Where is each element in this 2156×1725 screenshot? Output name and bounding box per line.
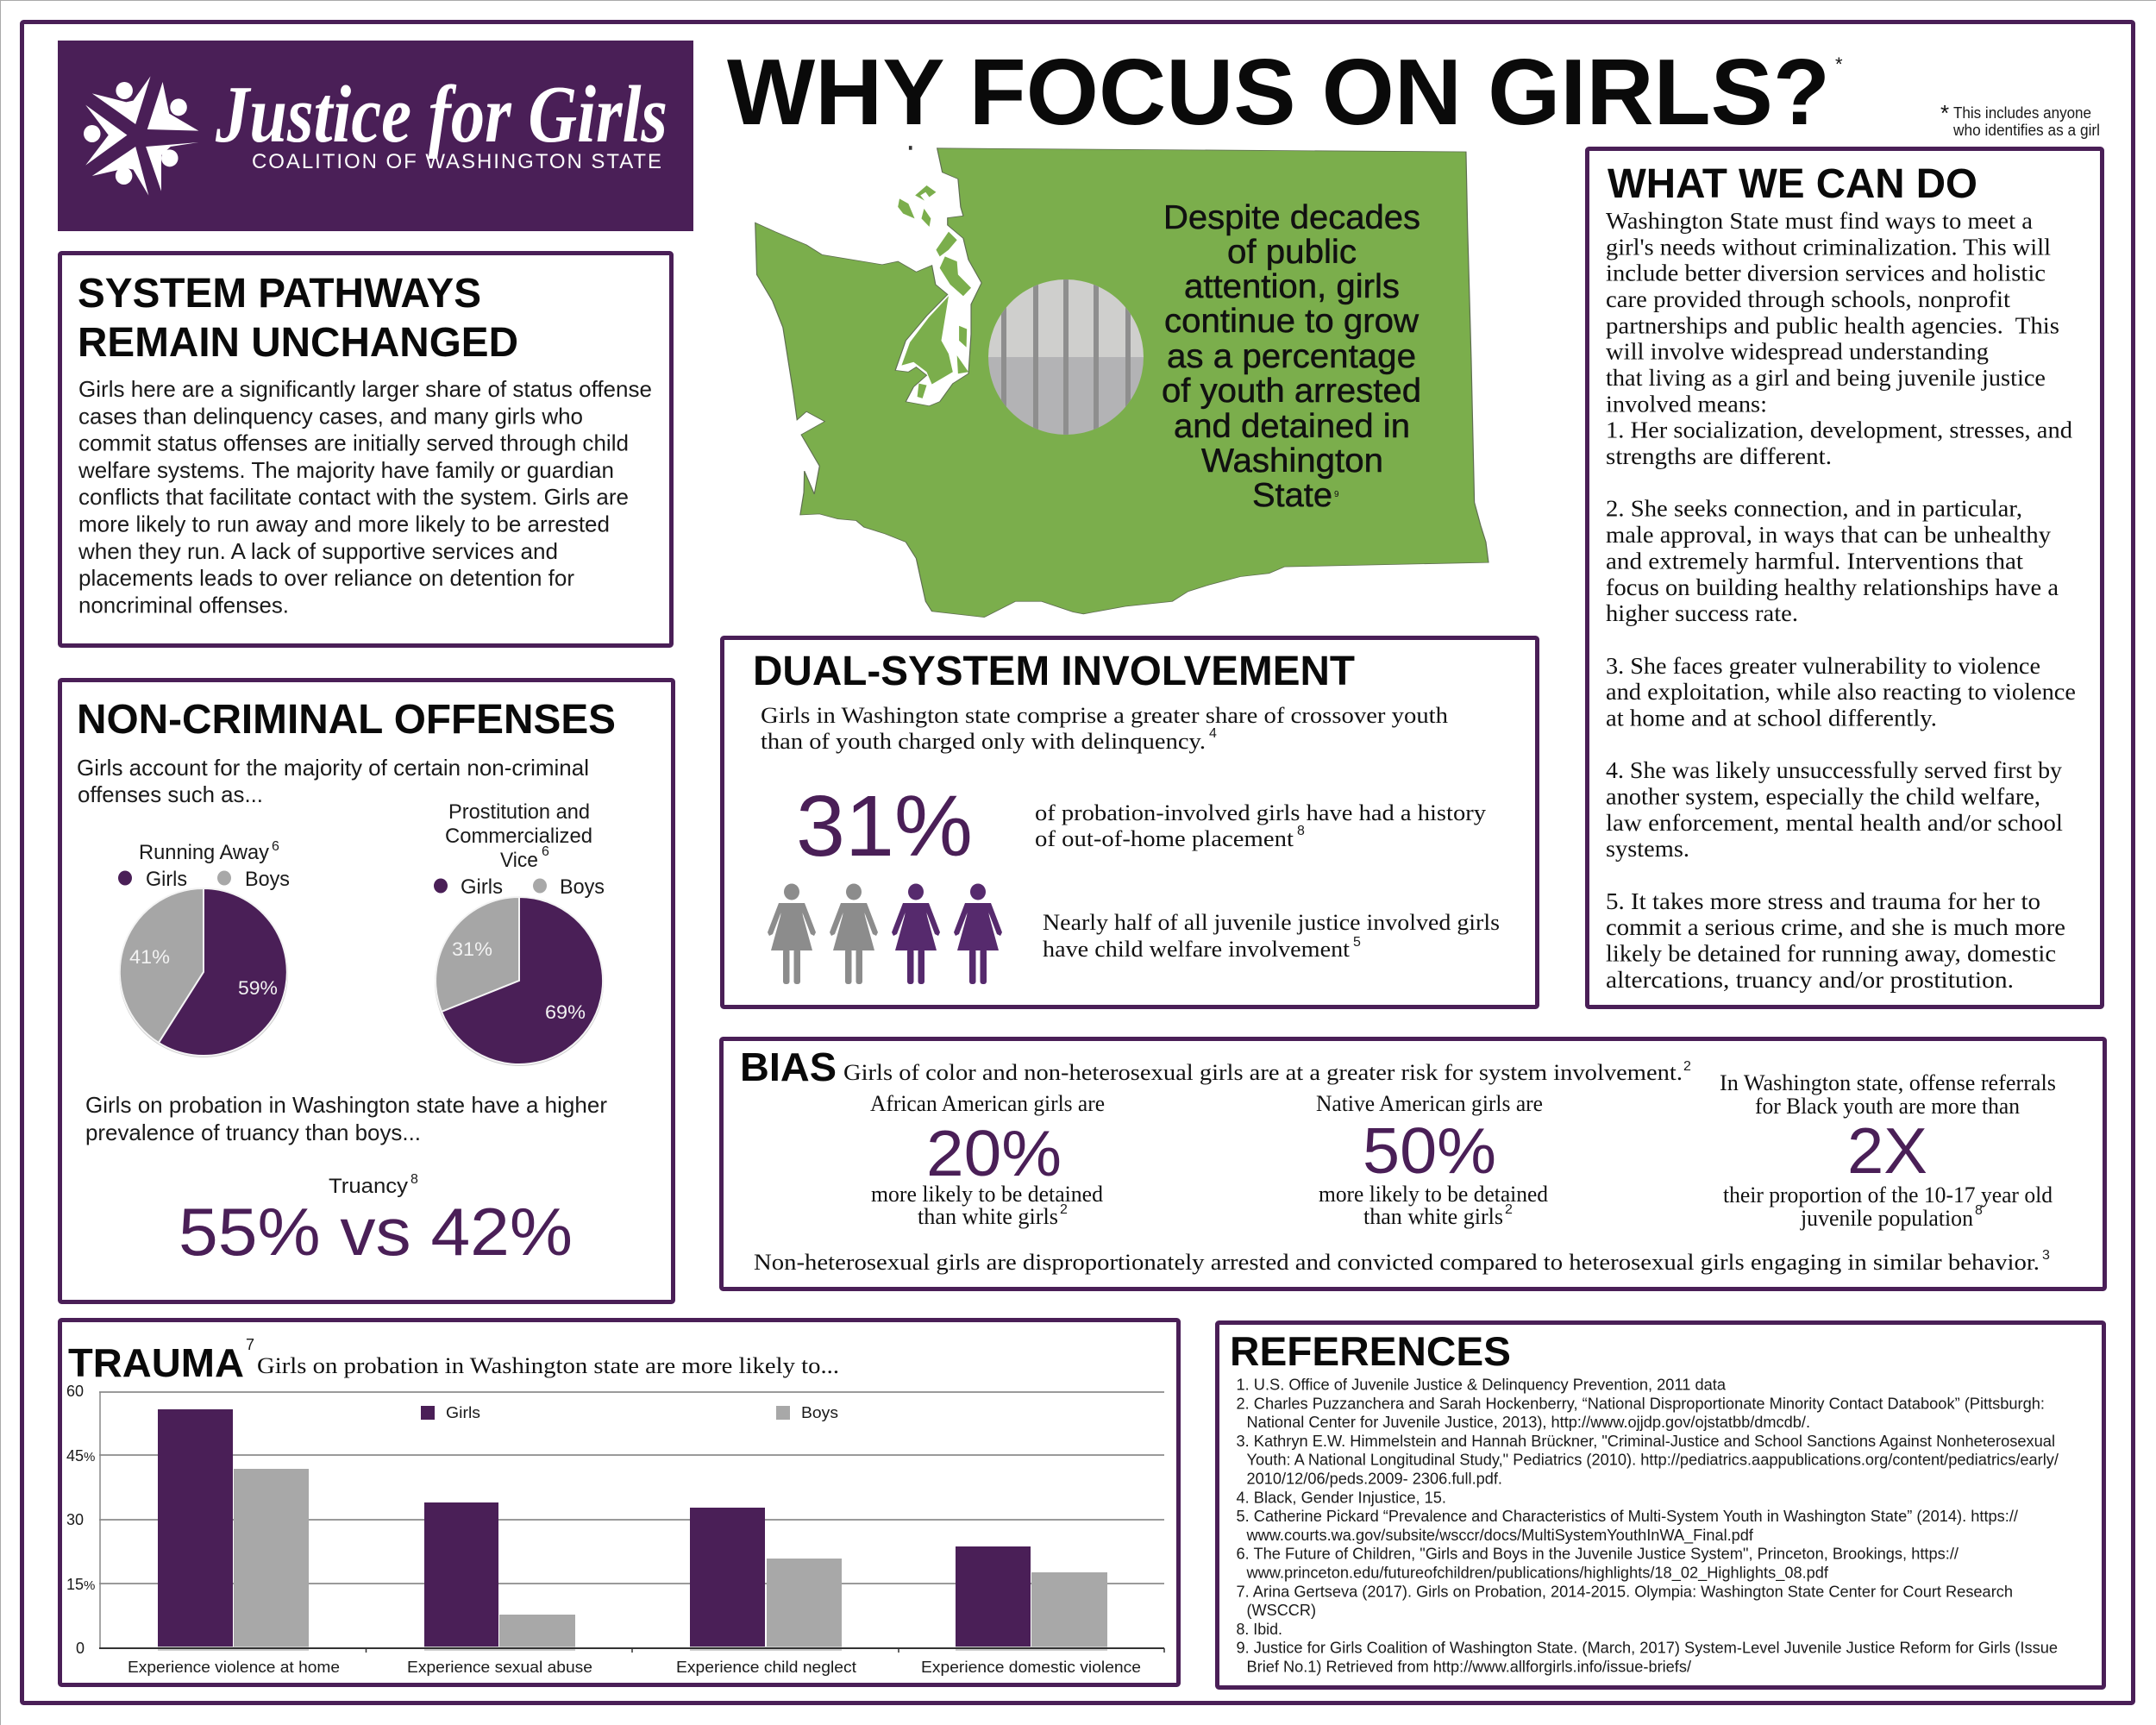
title: WHY FOCUS ON GIRLS? bbox=[727, 40, 1830, 145]
bars: domestic violence bbox=[956, 1546, 1107, 1647]
stat: Native American girls 50%: more likely to be detained bbox=[1319, 1182, 1548, 1207]
text block: what we can do body: 2. She seeks connection, and in particular, bbox=[1606, 496, 2022, 522]
text block: bias intro: Girls of color and non-heterosexual girls are at a greater risk for system involvement. bbox=[843, 1060, 1683, 1085]
stat: 31%: 31% bbox=[796, 778, 973, 875]
text block: truancy intro bbox=[85, 1092, 607, 1145]
legend: girls and boys bbox=[421, 1404, 838, 1421]
pie chart: running away: 59% bbox=[238, 977, 278, 999]
callout: despite decades: continue to grow bbox=[1164, 303, 1420, 340]
logo subtitle: COALITION OF WASHINGTON STATE bbox=[252, 150, 661, 173]
category labels bbox=[128, 1659, 1141, 1676]
icon: four girl figures bbox=[768, 883, 1002, 984]
heading: references: REFERENCES bbox=[1230, 1328, 1511, 1374]
stat: African American girls 20%: 2 bbox=[1060, 1202, 1068, 1217]
text block: what we can do body: another system, especially the child welfare, bbox=[1606, 783, 2040, 809]
text block: system pathways body: placements leads to over reliance on detention for bbox=[78, 565, 574, 591]
stat: Black youth 2X: for Black youth are more than bbox=[1755, 1094, 2020, 1119]
axis labels: 30 bbox=[66, 1511, 84, 1528]
panel: system pathways bbox=[60, 254, 671, 645]
chart title: prostitution and commercialized vice: Commercialized bbox=[445, 825, 592, 848]
text block: reference list: 2. Charles Puzzanchera and Sarah Hockenberry, “National Disproportionate Minority Contact Databook” (Pittsburgh: bbox=[1237, 1394, 2045, 1412]
pie chart: running away: 41% bbox=[129, 946, 170, 968]
label: truancy: 8 bbox=[411, 1172, 418, 1187]
stat: African American girls 20%: more likely to be detained bbox=[871, 1182, 1103, 1207]
text block: bias intro: 2 bbox=[1683, 1059, 1691, 1074]
category labels: Experience sexual abuse bbox=[407, 1659, 592, 1676]
text block: reference list: 6. The Future of Children, "Girls and Boys in the Juvenile Justice System", Princeton, Brookings, https:// bbox=[1237, 1545, 1959, 1563]
text block: what we can do body: 3. She faces greater vulnerability to violence bbox=[1606, 653, 2040, 679]
text block: dual-system intro: 4 bbox=[1209, 726, 1217, 741]
heading: trauma: 7 bbox=[246, 1336, 254, 1353]
text block: what we can do body: altercations, truancy and/or prostitution. bbox=[1606, 967, 2014, 993]
text block: what we can do body: focus on building healthy relationships have a bbox=[1606, 574, 2059, 600]
text block: intro bbox=[77, 755, 589, 807]
stat: Black youth 2X: In Washington state, offense referrals bbox=[1720, 1070, 2056, 1095]
callout: despite decades: of public bbox=[1227, 234, 1357, 271]
stat: African American girls 20% bbox=[870, 1091, 1105, 1229]
text block: what we can do body: partnerships and public health agencies. This bbox=[1606, 312, 2059, 338]
text block: what we can do body: 5. It takes more stress and trauma for her to bbox=[1606, 888, 2040, 914]
stat: Native American girls 50% bbox=[1316, 1091, 1548, 1229]
icon: jail bars bbox=[988, 279, 1144, 435]
label: truancy: Truancy bbox=[329, 1175, 408, 1198]
text block: system pathways body: Girls here are a significantly larger share of status offense bbox=[78, 376, 652, 402]
text block: child welfare involvement: Nearly half of all juvenile justice involved girls bbox=[1043, 910, 1500, 935]
callout: despite decades: attention, girls bbox=[1184, 268, 1400, 305]
text block: out-of-home placement: of out-of-home placement bbox=[1035, 826, 1294, 851]
text block: what we can do body: male approval, in ways that can be unhealthy bbox=[1606, 522, 2052, 548]
chart title: prostitution and commercialized vice: Vice bbox=[500, 849, 538, 872]
callout: despite decades bbox=[1162, 199, 1421, 514]
text block: non-heterosexual girls: 3 bbox=[2042, 1248, 2050, 1263]
text block: what we can do body: will involve widespread understanding bbox=[1606, 339, 1989, 365]
icon: star of figures bbox=[84, 76, 198, 196]
legend: prostitution: Girls bbox=[461, 875, 503, 899]
pie chart: running away bbox=[119, 888, 288, 1057]
text block: reference list: 8. Ibid. bbox=[1237, 1620, 1282, 1638]
axis labels: 45% bbox=[66, 1447, 95, 1465]
text block: what we can do body: care provided through schools, nonprofit bbox=[1606, 286, 2011, 312]
heading: non-criminal offenses: NON-CRIMINAL OFFENSES bbox=[77, 697, 616, 743]
text block: what we can do body: 4. She was likely unsuccessfully served first by bbox=[1606, 757, 2063, 783]
text block: what we can do body: involved means: bbox=[1606, 391, 1767, 417]
text block: what we can do body: girl's needs without criminalization. This will bbox=[1606, 234, 2051, 260]
stat: Black youth 2X: 8 bbox=[1975, 1203, 1983, 1218]
text block: system pathways body: cases than delinquency cases, and many girls who bbox=[78, 403, 583, 429]
heading: dual-system involvement: DUAL-SYSTEM INVOLVEMENT bbox=[753, 649, 1355, 694]
bars: violence at home bbox=[158, 1409, 309, 1647]
heading: what we can do: WHAT WE CAN DO bbox=[1608, 161, 1977, 207]
text block: reference list: www.princeton.edu/futureofchildren/publications/highlights/18_02_Highlights_08.pdf bbox=[1246, 1563, 1829, 1582]
callout: despite decades: Despite decades bbox=[1163, 199, 1420, 236]
bar chart: trauma bbox=[66, 1383, 1164, 1676]
callout: despite decades: of youth arrested bbox=[1162, 373, 1421, 410]
text block: system pathways body bbox=[78, 376, 652, 618]
chart title: prostitution and commercialized vice: Prostitution and bbox=[448, 800, 590, 824]
axis labels: 60 bbox=[66, 1383, 84, 1400]
text block: what we can do body: higher success rate. bbox=[1606, 600, 1798, 626]
text block: what we can do body: and exploitation, while also reacting to violence bbox=[1606, 679, 2076, 705]
heading: system pathways bbox=[78, 271, 518, 366]
stat: Black youth 2X: 2X bbox=[1847, 1114, 1927, 1187]
stat: Native American girls 50%: 2 bbox=[1505, 1202, 1513, 1217]
stat: Native American girls 50%: 50% bbox=[1363, 1114, 1496, 1187]
text block: system pathways body: commit status offenses are initially served through child bbox=[78, 430, 629, 456]
text block: reference list bbox=[1237, 1375, 2059, 1675]
logo banner bbox=[58, 41, 693, 231]
callout: despite decades: State bbox=[1252, 477, 1332, 514]
callout: despite decades: as a percentage bbox=[1167, 338, 1416, 375]
text block: reference list: National Center for Juvenile Justice, 2013), http://www.ojjdp.gov/ojstatbb/dmcdb/. bbox=[1247, 1413, 1810, 1431]
axis labels: 0 bbox=[76, 1640, 85, 1657]
stat: Black youth 2X: their proportion of the 10-17 year old bbox=[1723, 1182, 2053, 1208]
pie chart: prostitution: 31% bbox=[452, 938, 492, 960]
text block: reference list: 3. Kathryn E.W. Himmelstein and Hannah Brückner, "Criminal-Justice and School Sanctions Against Nonheterosexual bbox=[1237, 1432, 2055, 1450]
text block: child welfare involvement bbox=[1043, 910, 1500, 962]
panel: bias bbox=[721, 1038, 2104, 1289]
callout: despite decades: Washington bbox=[1201, 442, 1383, 480]
text block: what we can do body: at home and at school differently. bbox=[1606, 706, 1937, 731]
text block: system pathways body: noncriminal offenses. bbox=[78, 592, 289, 618]
callout: despite decades: and detained in bbox=[1174, 408, 1410, 445]
text block: dual-system intro: than of youth charged only with delinquency. bbox=[761, 729, 1206, 754]
panel: non-criminal offenses bbox=[60, 680, 673, 1302]
text block: child welfare involvement: 5 bbox=[1353, 935, 1361, 950]
legend: prostitution: Boys bbox=[560, 875, 605, 899]
legend: running away: Girls bbox=[146, 868, 187, 891]
bars: sexual abuse bbox=[424, 1502, 575, 1647]
text block: trauma intro: Girls on probation in Washington state are more likely to... bbox=[257, 1353, 839, 1378]
panel: dual-system involvement bbox=[723, 638, 1537, 1007]
text block: system pathways body: when they run. A lack of supportive services and bbox=[78, 538, 558, 564]
text block: dual-system intro bbox=[761, 703, 1448, 754]
text block: reference list: 2010/12/06/peds.2009- 2306.full.pdf. bbox=[1247, 1470, 1502, 1487]
legend: girls and boys: Boys bbox=[801, 1404, 838, 1421]
logo wordmark: Justice for Girls bbox=[215, 70, 667, 160]
stat: African American girls 20%: African American girls are bbox=[870, 1091, 1105, 1116]
text block: what we can do body: systems. bbox=[1606, 836, 1689, 862]
text block: reference list: Brief No.1) Retrieved from http://www.allforgirls.info/issue-briefs/ bbox=[1247, 1658, 1692, 1675]
text block: non-heterosexual girls: Non-heterosexual girls are disproportionately arrested and convicted compared to heterosexual girls engaging in similar behavior. bbox=[754, 1250, 2040, 1275]
stat: Black youth 2X bbox=[1720, 1070, 2056, 1231]
heading: system pathways: REMAIN UNCHANGED bbox=[78, 320, 518, 366]
pie chart: prostitution bbox=[435, 897, 604, 1066]
text block: out-of-home placement: 8 bbox=[1297, 824, 1305, 838]
stat: African American girls 20%: 20% bbox=[926, 1117, 1062, 1189]
chart title: running away: 6 bbox=[272, 839, 279, 854]
stat: Black youth 2X: juvenile population bbox=[1800, 1206, 1973, 1231]
text block: system pathways body: conflicts that facilitate contact with the system. Girls are bbox=[78, 484, 629, 510]
panel: what we can do bbox=[1587, 148, 2103, 1007]
text block: out-of-home placement bbox=[1035, 800, 1486, 851]
text block: what we can do body: commit a serious crime, and she is much more bbox=[1606, 914, 2065, 940]
axis labels: 15% bbox=[66, 1576, 95, 1593]
legend: running away: Boys bbox=[245, 868, 290, 891]
axis labels bbox=[66, 1383, 95, 1657]
stat: truancy 55% vs 42%: 55% vs 42% bbox=[179, 1194, 573, 1270]
text block: truancy intro: prevalence of truancy than boys... bbox=[85, 1120, 421, 1145]
text block: what we can do body: include better diversion services and holistic bbox=[1606, 260, 2046, 286]
text block: system pathways body: more likely to run away and more likely to be arrested bbox=[78, 511, 610, 536]
text block: what we can do body: likely be detained for running away, domestic bbox=[1606, 940, 2056, 966]
legend: running away bbox=[118, 868, 290, 891]
text block: what we can do body: that living as a girl and being juvenile justice bbox=[1606, 365, 2046, 391]
text block: reference list: Youth: A National Longitudinal Study," Pediatrics (2010). http://pediatrics.aappublications.org/content/pediatrics/early/ bbox=[1247, 1451, 2059, 1469]
footnote: anyone who identifies as a girl: who identifies as a girl bbox=[1952, 122, 2100, 139]
text block: system pathways body: welfare systems. The majority have family or guardian bbox=[78, 457, 614, 483]
heading: trauma: TRAUMA bbox=[68, 1340, 244, 1385]
legend: girls and boys: Girls bbox=[446, 1404, 480, 1421]
stat: African American girls 20%: than white girls bbox=[918, 1204, 1058, 1229]
chart title: prostitution and commercialized vice: 6 bbox=[542, 844, 549, 859]
text block: what we can do body bbox=[1606, 208, 2076, 993]
panel: references bbox=[1218, 1323, 2104, 1687]
text block: truancy intro: Girls on probation in Washington state have a higher bbox=[85, 1092, 607, 1118]
stat: Native American girls 50%: than white girls bbox=[1363, 1204, 1503, 1229]
footnote: anyone who identifies as a girl: This includes anyone bbox=[1953, 104, 2091, 122]
text block: intro: offenses such as... bbox=[78, 781, 263, 807]
pie chart: prostitution: 69% bbox=[545, 1001, 586, 1023]
category labels: Experience domestic violence bbox=[921, 1659, 1141, 1676]
legend: prostitution bbox=[434, 875, 605, 899]
category labels: Experience child neglect bbox=[676, 1659, 856, 1676]
text block: intro: Girls account for the majority of certain non-criminal bbox=[77, 755, 589, 781]
title: * bbox=[1835, 53, 1843, 75]
chart title: running away: Running Away bbox=[139, 841, 269, 864]
text block: what we can do body: and extremely harmful. Interventions that bbox=[1606, 548, 2024, 574]
text block: what we can do body: Washington State must find ways to meet a bbox=[1606, 208, 2033, 234]
bars: child neglect bbox=[690, 1508, 842, 1647]
category labels: Experience violence at home bbox=[128, 1659, 340, 1676]
text block: reference list: 1. U.S. Office of Juvenile Justice & Delinquency Prevention, 2011 data bbox=[1237, 1375, 1727, 1394]
text block: what we can do body: strengths are different. bbox=[1606, 443, 1832, 469]
heading: bias: BIAS bbox=[740, 1044, 837, 1089]
text block: reference list: 9. Justice for Girls Coalition of Washington State. (March, 2017) System-Level Juvenile Justice Reform for Girls (Issue bbox=[1237, 1639, 2058, 1657]
text block: reference list: 7. Arina Gertseva (2017). Girls on Probation, 2014-2015. Olympia: Washington State Center for Court Research bbox=[1237, 1582, 2013, 1600]
stat: Native American girls 50%: Native American girls are bbox=[1316, 1091, 1543, 1116]
panel: trauma bbox=[60, 1320, 1178, 1685]
chart title: prostitution and commercialized vice bbox=[445, 800, 592, 872]
text block: child welfare involvement: have child welfare involvement bbox=[1043, 937, 1351, 962]
footnote: anyone who identifies as a girl: * bbox=[1940, 100, 1949, 126]
callout: despite decades: 9 bbox=[1334, 490, 1339, 499]
heading: system pathways: SYSTEM PATHWAYS bbox=[78, 271, 481, 317]
text block: what we can do body: 1. Her socialization, development, stresses, and bbox=[1606, 417, 2073, 443]
text block: reference list: (WSCCR) bbox=[1247, 1601, 1316, 1619]
text block: dual-system intro: Girls in Washington state comprise a greater share of crossover youth bbox=[761, 703, 1448, 728]
text block: what we can do body: law enforcement, mental health and/or school bbox=[1606, 810, 2063, 836]
text block: reference list: 4. Black, Gender Injustice, 15. bbox=[1237, 1488, 1446, 1506]
text block: reference list: www.courts.wa.gov/subsite/wsccr/docs/MultiSystemYouthInWA_Final.pdf bbox=[1246, 1526, 1754, 1545]
text block: reference list: 5. Catherine Pickard “Prevalence and Characteristics of Multi-System Youth in Washington State” (2014). https:// bbox=[1237, 1507, 2019, 1525]
map of Washington state bbox=[755, 146, 1489, 618]
footnote: anyone who identifies as a girl bbox=[1940, 100, 2100, 139]
text block: out-of-home placement: of probation-involved girls have had a history bbox=[1035, 800, 1486, 825]
